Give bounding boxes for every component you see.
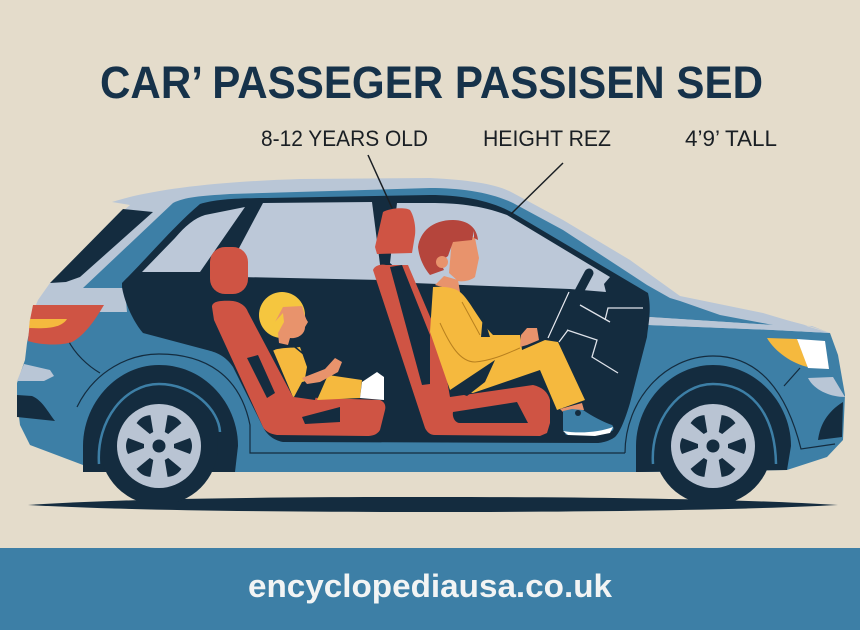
car illustration <box>17 178 845 505</box>
front bumper highlight <box>808 377 845 397</box>
rear bumper highlight <box>17 364 54 381</box>
hood highlight <box>648 300 830 333</box>
ground shadow <box>28 497 838 512</box>
body contour lines <box>68 340 835 453</box>
footer url: encyclopediausa.co.uk <box>248 568 612 604</box>
driver <box>418 220 614 436</box>
front vent <box>818 402 843 440</box>
rear side window <box>238 202 382 280</box>
title: CAR’ PASSEGER PASSISEN SED <box>100 57 763 108</box>
callout line: age <box>368 155 392 208</box>
dashboard cracks <box>567 305 643 373</box>
front wheel arch <box>636 365 791 472</box>
rear vent <box>17 395 55 421</box>
callout line: height <box>511 163 563 214</box>
front side window <box>390 203 610 292</box>
label: height: HEIGHT REZ <box>483 126 611 151</box>
label: age: 8-12 YEARS OLD <box>261 126 428 151</box>
rear wheel arch <box>83 365 238 472</box>
child <box>259 292 384 400</box>
rear quarter window <box>142 207 245 272</box>
label: tall: 4’9’ TALL <box>685 126 777 151</box>
tail light <box>28 305 104 345</box>
rear seat <box>210 247 385 436</box>
rear tire <box>99 384 220 505</box>
front seat <box>373 208 550 436</box>
steering wheel <box>548 273 589 342</box>
front tire <box>653 384 776 505</box>
rear window <box>50 209 153 283</box>
headlight <box>767 338 829 369</box>
car blue body <box>17 188 845 472</box>
interior and window frame <box>122 195 650 443</box>
car light upper shell <box>33 178 830 360</box>
footer banner <box>0 548 860 630</box>
